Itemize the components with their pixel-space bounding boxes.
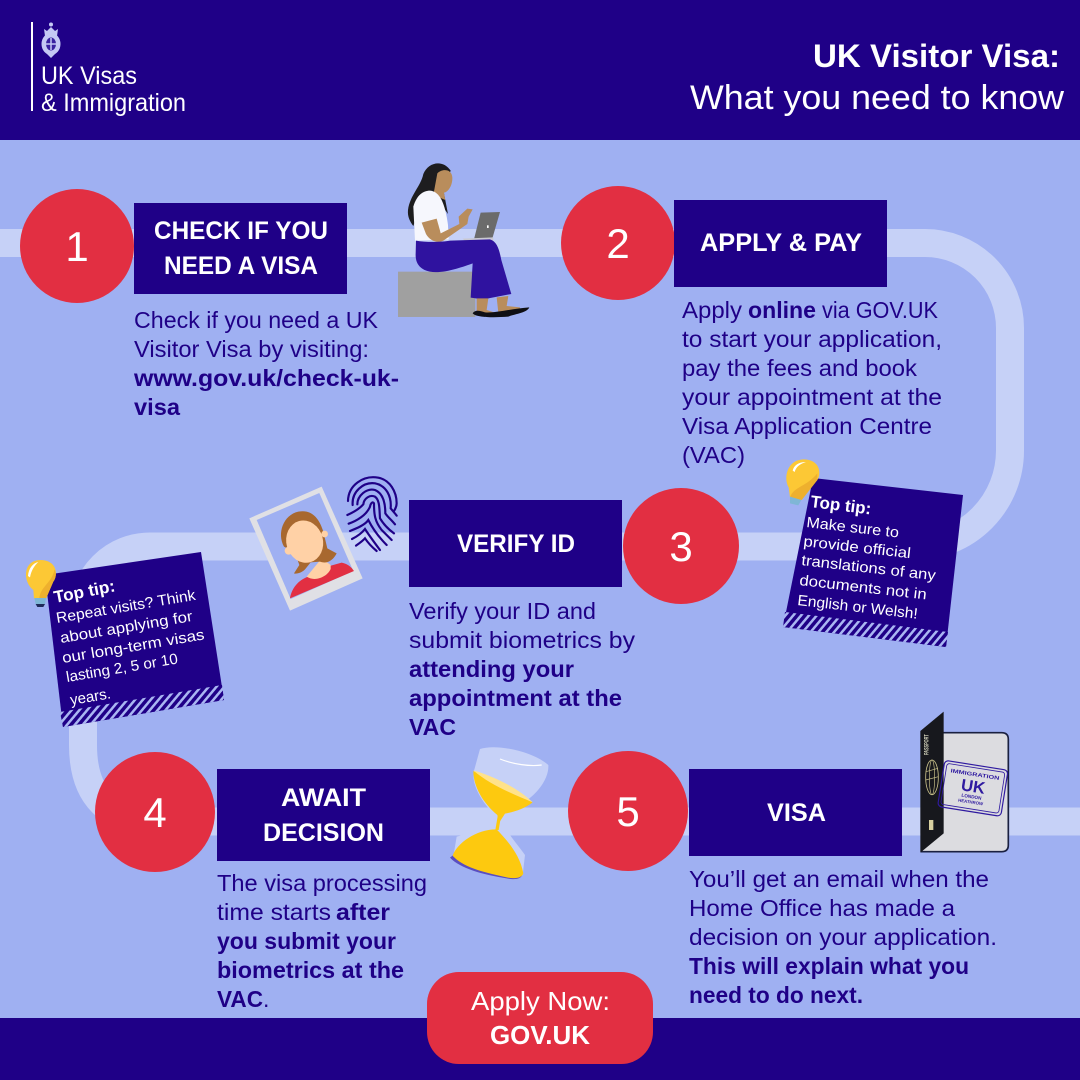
top tip: repeat visits: years.: [69, 685, 112, 709]
step 5 text: This will explain what you: [689, 953, 969, 979]
step 5 number: 5: [616, 788, 640, 835]
step 1 heading: CHECK IF YOU: [154, 217, 328, 245]
step 2 number: 2: [606, 220, 630, 267]
step 4 text: VAC: [217, 986, 263, 1012]
button: Apply Now GOV.UK: [427, 972, 653, 1064]
top tip: translations: documents not in: [799, 572, 928, 603]
icon: passport with UK stamp: PASSPORT: [923, 734, 930, 755]
step 3: [409, 488, 739, 740]
step 3 heading: [409, 500, 622, 587]
step 5 text: need to do next.: [689, 982, 863, 1008]
step 2 text: Visa Application Centre: [682, 413, 932, 439]
button: Apply Now GOV.UK: Apply Now:: [471, 986, 610, 1016]
step 4 text: biometrics at the: [217, 957, 404, 983]
title: [690, 38, 1064, 117]
icon: light bulb: [786, 459, 819, 505]
step 4 heading: AWAIT: [281, 784, 366, 812]
step 1: [20, 189, 399, 420]
step 5 text: Home Office has made a: [689, 895, 955, 921]
step 5 number: [568, 751, 688, 871]
step 1 text: visa: [134, 394, 180, 420]
step 4 text: [217, 870, 427, 1012]
step 2 text: (VAC): [682, 442, 745, 468]
step 1 heading: [134, 203, 347, 294]
winding route path: [0, 243, 1080, 822]
step 3 heading: VERIFY ID: [457, 530, 575, 558]
top tip: repeat visits: about applying for: [59, 608, 194, 647]
top tip: repeat visits: lasting 2, 5 or 10: [65, 651, 179, 686]
icon: passport with UK stamp: IMMIGRATION: [950, 768, 1000, 782]
step 2 text: online: [748, 297, 816, 323]
step 4 number: 4: [143, 789, 167, 836]
step 2 text: via GOV.UK: [822, 297, 939, 323]
step 2: [561, 186, 942, 468]
icon: passport with UK stamp: HEATHROW: [958, 798, 984, 807]
logo: UK Visas and Immigration: UK Visas: [41, 62, 137, 90]
step 3 text: submit biometrics by: [409, 627, 636, 653]
step 2 text: your appointment at the: [682, 384, 942, 410]
step 1 heading: NEED A VISA: [164, 252, 318, 280]
step 2 text: pay the fees and book: [682, 355, 918, 381]
step 5 text: [689, 866, 997, 1008]
icon: ID photo: [249, 487, 363, 611]
top tip: translations: English or Welsh!: [797, 592, 919, 623]
title: UK Visitor Visa:: [813, 38, 1060, 74]
step 2 heading: [674, 200, 887, 287]
step 4 number: [95, 752, 215, 872]
step 3 number: 3: [669, 523, 693, 570]
step 2 heading: APPLY & PAY: [700, 229, 862, 257]
icon: passport with UK stamp: LONDON: [961, 793, 982, 801]
top tip: translations: Top tip:: [810, 492, 872, 518]
logo: UK Visas and Immigration: [31, 22, 186, 117]
step 4 heading: [217, 769, 430, 861]
step 4: [95, 752, 430, 1012]
step 2 text: [682, 297, 942, 468]
button: Apply Now GOV.UK: GOV.UK: [490, 1020, 590, 1050]
title: What you need to know: [690, 79, 1064, 117]
step 2 text: to start your application,: [682, 326, 942, 352]
top tip: repeat visits: Top tip:: [52, 576, 117, 607]
step 3 text: attending your: [409, 656, 574, 682]
step 2 number: [561, 186, 675, 300]
icon: passport with UK stamp: [920, 712, 1008, 853]
icon: fingerprint: [347, 477, 397, 551]
icon: woman with laptop on a block: [398, 163, 529, 317]
header bar: [0, 0, 1080, 140]
step 5: [568, 751, 997, 1008]
logo: UK Visas and Immigration: & Immigration: [41, 89, 186, 117]
step 4 text: .: [263, 986, 269, 1012]
top tip: repeat visits: [26, 552, 224, 727]
step 4 text: you submit your: [217, 928, 396, 954]
step 2 text: Apply: [682, 297, 743, 323]
top tip: repeat visits: Repeat visits? Think: [55, 587, 197, 627]
step 5 text: decision on your application.: [689, 924, 997, 950]
top tip: translations: [783, 459, 963, 647]
icon: hourglass: [450, 747, 548, 879]
step 1 text: Visitor Visa by visiting:: [134, 336, 369, 362]
step 1 number: [20, 189, 134, 303]
icon: light bulb: [26, 560, 56, 607]
top tip: repeat visits: our long-term visas: [61, 626, 206, 667]
step 4 text: time starts: [217, 899, 331, 925]
step 3 text: Verify your ID and: [409, 598, 596, 624]
step 3 text: VAC: [409, 714, 456, 740]
icon: passport with UK stamp: UK: [960, 775, 986, 798]
step 1 number: 1: [65, 223, 89, 270]
top tip: translations: Make sure to: [806, 514, 900, 542]
step 1 text: Check if you need a UK: [134, 307, 379, 333]
step 5 heading: [689, 769, 902, 856]
step 4 text: The visa processing: [217, 870, 427, 896]
step 5 heading: VISA: [767, 799, 826, 827]
step 1 text: [133, 307, 399, 420]
top tip: translations: provide official: [803, 533, 912, 562]
step 3 number: [623, 488, 739, 604]
step 3 text: appointment at the: [409, 685, 622, 711]
top tip: translations: translations of any: [801, 552, 937, 584]
footer bar: [0, 1018, 1080, 1080]
step 1 text: www.gov.uk/check-uk-: [133, 365, 399, 391]
step 3 text: [409, 598, 636, 740]
step 4 heading: DECISION: [263, 819, 384, 847]
step 5 text: You’ll get an email when the: [689, 866, 989, 892]
step 4 text: after: [336, 899, 390, 925]
